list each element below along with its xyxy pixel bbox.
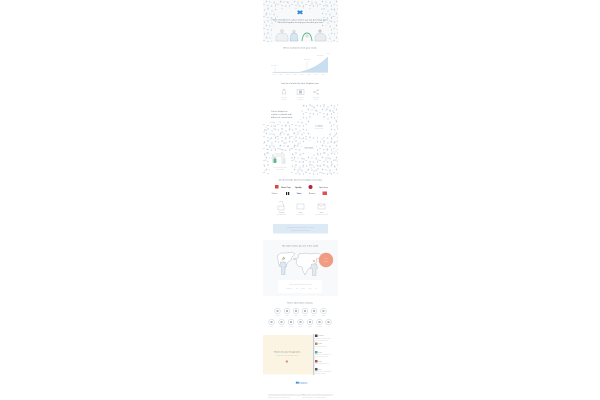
panel: tweets: @tom	[318, 368, 321, 370]
footer logo	[296, 382, 308, 385]
logos: brands: Merriman	[309, 192, 315, 195]
text box: languages: Plus	[309, 288, 312, 290]
icons: bottom row circles	[269, 319, 331, 325]
footer text right	[302, 392, 334, 399]
footer text right: Thanks to all the people who make Dropbox what it is.	[302, 394, 333, 397]
panel: tweets: this great product	[315, 372, 325, 375]
heading: growth: We've evolved to meet your needs	[283, 46, 318, 50]
footer logo: Dropbox	[298, 383, 308, 385]
logos: brands: Hyatt Group	[319, 186, 328, 189]
panel: tweets: It just works everywhere I go	[315, 353, 331, 356]
panel: cream box: Here's to many more great things ahead	[276, 354, 298, 356]
text box: languages	[278, 280, 322, 293]
labels: bottom row	[270, 324, 330, 328]
panel: header	[263, 0, 338, 42]
text box: languages: Work and share with people everywhere	[289, 282, 312, 286]
labels: bottom row: Projects	[289, 324, 294, 328]
labels: top row: Notes	[285, 314, 289, 316]
labels: bottom row: School	[308, 326, 313, 328]
heading: how people use: Here's what others tell you	[287, 302, 314, 304]
chart: users over time: 2008	[273, 74, 276, 76]
chart: users over time: 100K users	[271, 65, 278, 67]
labels: bottom row: Travel	[270, 326, 274, 328]
panel: global map	[263, 240, 338, 296]
labels: bottom row: Family	[280, 326, 284, 328]
logos: brands: Yahoo	[297, 193, 301, 195]
callout: red circle: Dropbox	[324, 260, 329, 262]
chart: users over time: 2013	[308, 74, 311, 76]
chart: users over time: 2011	[294, 74, 297, 76]
panel: tweets: @sara	[318, 360, 322, 362]
panel: tweets: Love sharing photos	[315, 344, 327, 348]
text box: languages: API	[315, 286, 318, 290]
callout: circle stat bottom: 500 million	[304, 148, 314, 150]
icons: three features: Access from	[297, 96, 304, 98]
callout: circle stat top: 1.2 billion	[315, 126, 323, 128]
footer text right: Copyright Dropbox, Inc. All rights reserved.	[302, 396, 326, 399]
footer text left	[268, 392, 305, 399]
text box: languages: Teams	[301, 288, 305, 290]
panel: tweets: Couldn't run my team without	[315, 370, 332, 373]
callout: red circle	[319, 253, 333, 267]
chart: users over time: 2014	[315, 74, 318, 76]
footer text left: Sources: internal Dropbox data and customer surveys as of 2015.	[268, 392, 305, 396]
labels: bottom row: Art	[328, 324, 330, 328]
labels: top row	[276, 314, 326, 316]
callout: blue box: Dropbox Business makes it easier for your team	[287, 226, 314, 229]
panel: tweets: Thanks for keeping my work	[315, 338, 331, 340]
illustration: left person	[280, 258, 286, 274]
chart: users over time	[271, 52, 330, 76]
icons: three features: securely	[282, 98, 287, 100]
callout: red circle: One	[325, 258, 328, 260]
icons: top row circles	[275, 308, 326, 314]
callout: circle stat top: files saved daily	[315, 128, 324, 130]
logos: brands	[272, 185, 328, 195]
chart: users over time: 500M	[326, 52, 330, 54]
footer text right: Numbers shown are approximate and rounded for clarity.	[302, 392, 334, 396]
chart: users over time: 2010	[287, 74, 290, 76]
text: user count intro: billions of connections	[271, 116, 293, 119]
labels: top row: Music	[294, 314, 298, 316]
text box: languages: Pro	[296, 288, 298, 290]
icons: three features: any device	[298, 98, 304, 100]
panel: tweets: @mike	[318, 352, 322, 354]
illustration: people in doorway: work together	[276, 168, 284, 170]
panel: users world dots	[263, 104, 338, 176]
labels: bottom row: Events	[318, 324, 322, 328]
stats: three icons	[277, 201, 328, 216]
logos: brands: National	[272, 192, 278, 195]
logos: brands: News Corp	[281, 187, 292, 189]
icons: three features: anyone	[314, 98, 318, 100]
icons: three features	[281, 89, 319, 100]
panel: cream box: Thanks for your imagination	[274, 350, 301, 354]
panel: tweets	[313, 334, 332, 375]
icons: three features: Store files	[281, 96, 287, 98]
stats: three icons: 4.2 billion	[279, 211, 285, 214]
text box: languages: Business	[286, 288, 292, 290]
text: user count intro	[271, 111, 293, 119]
stats: three icons: files collaborated	[277, 213, 286, 216]
panel: tweets: @anna	[318, 343, 322, 345]
labels: bottom row: Work	[299, 326, 302, 328]
chart: users over time: 2009	[280, 74, 283, 76]
footer text left: Dropbox is a trademark of Dropbox, Inc.	[268, 396, 291, 399]
panel: tweets: @dropbox	[318, 335, 324, 337]
footer text left: All product names and logos are trademarks of their owners.	[268, 394, 302, 397]
stats: three icons: 35,000	[320, 212, 324, 214]
illustration: right person	[310, 260, 318, 276]
panel: tweets: all my files always there	[315, 355, 329, 358]
chart: users over time: 300M users	[317, 55, 324, 57]
heading: brands: Join the brands who trust Dropbox every day	[278, 178, 323, 182]
callout: blue box	[273, 224, 328, 234]
chart: users over time: 2012	[301, 74, 304, 76]
callout: circle stat top	[315, 126, 324, 130]
panel: tweets: Happy birthday Dropbox!	[315, 362, 329, 365]
chart: users over time: 2015	[322, 74, 325, 76]
labels: top row: Docs	[313, 314, 316, 316]
illustration: people in doorway	[272, 154, 287, 170]
heading: cloud: Join the cloud in the best Dropbox ever	[281, 82, 319, 85]
illustration: people	[276, 30, 326, 41]
icons: three features: Share with	[313, 96, 319, 98]
panel: header: We built Dropbox to help you do what you love.	[278, 21, 324, 24]
chart: users over time: 100M users	[304, 59, 311, 61]
heading: map: No matter where you are in the world	[282, 244, 319, 248]
stats: three icons: companies in business	[315, 214, 328, 216]
text: user count intro: create a network with	[271, 113, 292, 116]
illustration: people in doorway: People around the world	[273, 166, 287, 168]
stats: three icons: 75,000	[299, 212, 303, 214]
text: user count intro: You've helped us	[271, 111, 288, 113]
logos: brands: Spotify	[295, 186, 303, 189]
panel: cream box	[263, 335, 313, 374]
illustration: world map	[277, 252, 322, 275]
labels: top row: Photos	[276, 314, 280, 316]
labels: top row: Plans	[303, 314, 307, 316]
labels: top row: Videos	[322, 314, 326, 316]
callout: blue box: to get things done and stay in sync	[291, 228, 310, 232]
intro text: Work shouldn't be a place where you just get things done.	[273, 18, 329, 22]
stats: three icons: teams at work	[297, 213, 305, 216]
panel: tweets: safe and close to hand	[315, 338, 328, 342]
icon: Dropbox logo	[297, 10, 303, 14]
